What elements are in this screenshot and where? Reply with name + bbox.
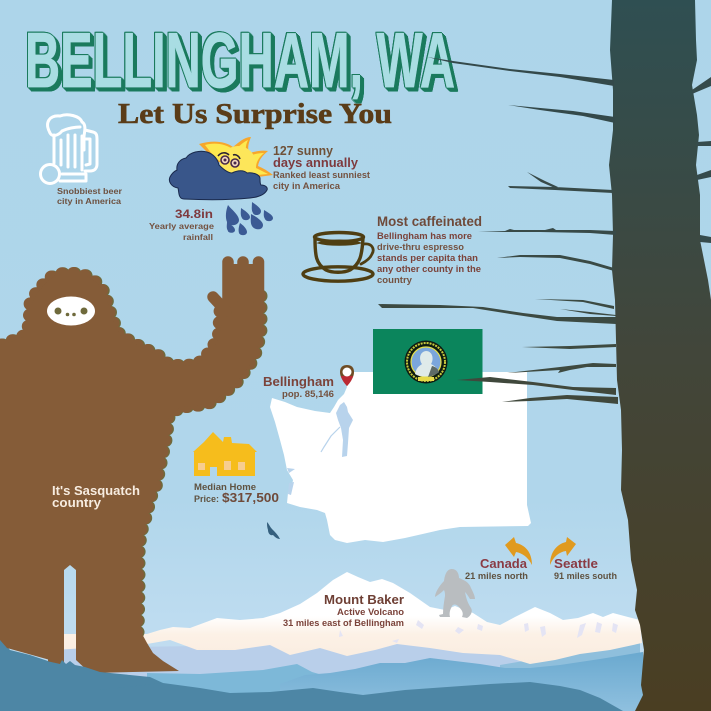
text: Seattle distance (554, 556, 617, 581)
text: Bellingham population: Bellingham (263, 374, 334, 389)
body (0, 264, 264, 673)
text: sasquatch country: country (52, 496, 101, 510)
text: most caffeinated: drive-thru espresso (377, 242, 464, 253)
text: sunny days: Ranked least sunniest (273, 170, 370, 180)
icon: small sasquatch silhouette (435, 569, 475, 618)
sasquatch (0, 262, 264, 673)
right side branches (692, 77, 711, 243)
foreground ridge (0, 638, 623, 711)
middle blue ridge (280, 652, 646, 711)
tree (378, 0, 711, 711)
arrow: Canada (505, 537, 532, 565)
text: snobbiest beer: Snobbiest beer (57, 186, 123, 196)
grass edge at the sasquatch's feet (0, 640, 163, 690)
text: Seattle distance: Seattle (554, 556, 598, 571)
text: rainfall: 34.8in (175, 207, 213, 221)
icon: rain drops (226, 202, 273, 235)
icon: coffee cup (303, 232, 373, 281)
subtitle: Let Us Surprise You (118, 99, 392, 130)
icon: beer mug (40, 115, 97, 184)
text: most caffeinated: Most caffeinated (377, 214, 482, 229)
text: sasquatch country (52, 484, 140, 510)
trunk (609, 0, 711, 711)
mountain landscape (0, 572, 646, 711)
text: most caffeinated: Bellingham has more (377, 231, 472, 242)
text: most caffeinated: any other county in the (377, 264, 481, 275)
Puget Sound (336, 402, 353, 457)
state seal (404, 340, 448, 384)
text: Seattle distance: 91 miles south (554, 571, 617, 581)
text: Canada distance: Canada (480, 556, 528, 571)
text: Canada distance: 21 miles north (465, 571, 528, 581)
text: Bellingham population: pop. 85,146 (282, 389, 334, 399)
text: Canada distance (465, 556, 528, 581)
branches (427, 57, 614, 86)
icon: location pin (340, 365, 354, 386)
arrow: Seattle (550, 537, 576, 565)
text: rainfall (149, 207, 214, 242)
text: rainfall: Yearly average (149, 221, 214, 231)
text: Mount Baker: Mount Baker (324, 593, 404, 607)
sun rays (199, 137, 273, 178)
text: snobbiest beer (57, 186, 123, 206)
text: Mount Baker: 31 miles east of Bellingham (283, 618, 404, 628)
text: snobbiest beer: city in America (57, 196, 121, 206)
cloud (169, 151, 267, 200)
text: median home price: $317,500 (222, 490, 279, 505)
map of Washington state (270, 372, 531, 543)
text: sunny days: 127 sunny (273, 144, 333, 158)
scalloped fur edge (3, 274, 261, 662)
text: most caffeinated (377, 214, 482, 286)
text: median home price (194, 482, 279, 505)
flag of Washington (373, 329, 482, 394)
face (47, 296, 95, 326)
sun eyes (221, 156, 229, 164)
fingers and thumb (213, 262, 258, 311)
icon: sun behind cloud (169, 137, 273, 200)
text: sunny days: city in America (273, 181, 341, 191)
icon: house (193, 432, 257, 476)
text: rainfall: rainfall (183, 232, 213, 242)
icon: eagle (267, 522, 280, 539)
text: sunny days: days annually (273, 156, 358, 170)
text: Mount Baker: Active Volcano (337, 607, 405, 617)
text: Bellingham population (263, 374, 334, 399)
text: Mount Baker (283, 593, 405, 628)
text: sunny days (273, 144, 370, 191)
text: median home price: Median Home (194, 482, 256, 493)
snowy range with Mount Baker (55, 572, 642, 664)
title: BELLINGHAM, WA (25, 16, 455, 104)
left blue ridge (147, 664, 340, 700)
text: most caffeinated: country (377, 275, 413, 286)
text: median home price: Price: (194, 494, 219, 505)
text: most caffeinated: stands per capita than (377, 253, 478, 264)
text: sasquatch country: It's Sasquatch (52, 484, 140, 498)
